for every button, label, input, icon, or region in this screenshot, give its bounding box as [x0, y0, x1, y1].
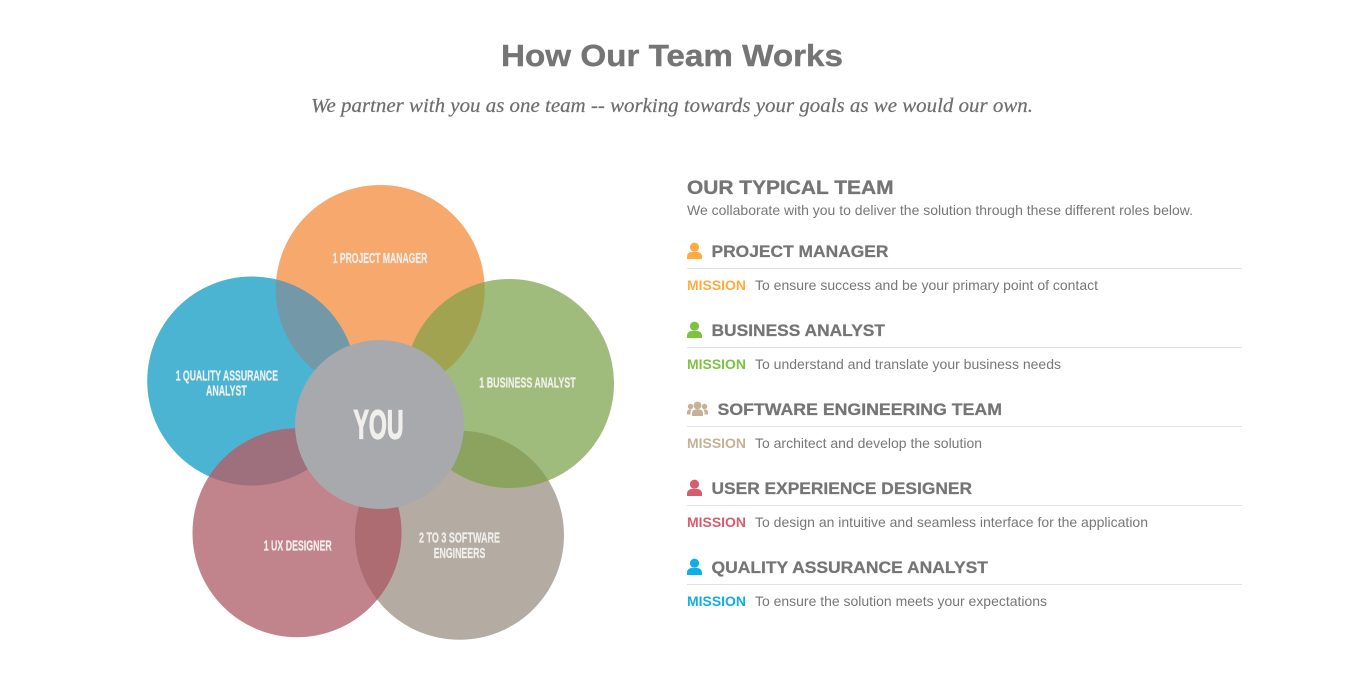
role heading: USER EXPERIENCE DESIGNER: [712, 479, 972, 498]
role: business analyst: [687, 321, 1242, 372]
label: business analyst: 1 BUSINESS ANALYST: [479, 375, 576, 392]
overlap: ux designer and software engineers: [355, 506, 402, 600]
label: quality assurance analyst: ANALYST: [206, 383, 247, 400]
role heading: SOFTWARE ENGINEERING TEAM: [718, 400, 1002, 419]
mission label: MISSION: [687, 277, 746, 293]
label: project manager: 1 PROJECT MANAGER: [333, 250, 427, 267]
role: project manager: [687, 242, 1242, 293]
icon: person orange: [687, 243, 702, 259]
mission label: MISSION: [687, 356, 746, 372]
circle: you: [295, 340, 464, 509]
icon: group of people: [687, 402, 708, 416]
circle: software engineers: [355, 431, 564, 640]
mission label: MISSION: [687, 435, 746, 451]
section heading: OUR TYPICAL TEAM: [687, 177, 894, 199]
role: quality assurance analyst: [687, 558, 1242, 609]
label: quality assurance analyst: 1 QUALITY ASSURANCE: [176, 368, 278, 385]
mission label: MISSION: [687, 514, 746, 530]
circle: ux designer: [192, 428, 402, 637]
mission text: To design an intuitive and seamless interface for the application: [755, 514, 1148, 530]
label: ux designer: 1 UX DESIGNER: [264, 538, 332, 555]
circle: business analyst: [405, 279, 614, 488]
icon: person green: [687, 322, 702, 338]
overlap: quality assurance and project manager: [276, 280, 350, 370]
mission text: To architect and develop the solution: [755, 435, 982, 451]
role heading: PROJECT MANAGER: [712, 242, 888, 261]
overlap: quality assurance and ux designer: [209, 428, 308, 486]
circle: quality assurance analyst: [147, 276, 356, 486]
role heading: QUALITY ASSURANCE ANALYST: [712, 558, 989, 577]
overlap: business analyst and project manager: [412, 282, 485, 372]
label: software engineers: ENGINEERS: [434, 545, 485, 562]
subtitle: We partner with you as one team -- working towards your goals as we would our own.: [311, 96, 1033, 117]
title: How Our Team Works: [501, 38, 843, 73]
mission text: To ensure success and be your primary point of contact: [755, 277, 1098, 293]
mission text: To understand and translate your business needs: [755, 356, 1061, 372]
role: software engineering team: [687, 400, 1242, 451]
role: user experience designer: [687, 479, 1242, 530]
mission text: To ensure the solution meets your expectations: [755, 593, 1047, 609]
circle: project manager: [276, 185, 485, 394]
label: you: YOU: [354, 401, 404, 447]
venn diagram: [147, 185, 614, 640]
role heading: BUSINESS ANALYST: [712, 321, 886, 340]
icon: person red: [687, 480, 702, 496]
icon: person blue: [687, 559, 702, 575]
section description: We collaborate with you to deliver the solution through these different roles below.: [687, 202, 1193, 218]
overlap: business analyst and software engineers: [450, 430, 548, 488]
label: software engineers: 2 TO 3 SOFTWARE: [419, 530, 500, 547]
mission label: MISSION: [687, 593, 746, 609]
